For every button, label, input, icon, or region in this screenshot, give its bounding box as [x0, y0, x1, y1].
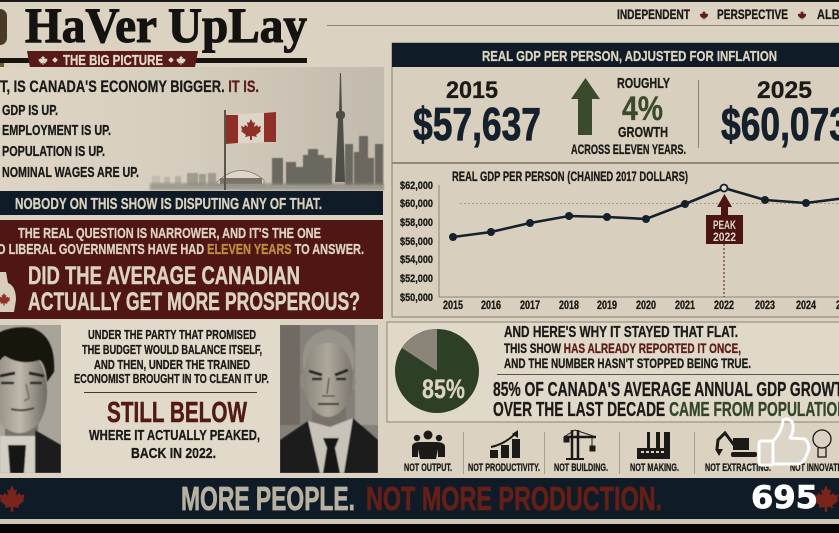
- stat: 2015: $57,637: [413, 98, 541, 150]
- portrait: left: [0, 325, 61, 473]
- x axis labels: 2023: [755, 300, 775, 312]
- stat: growth: ACROSS ELEVEN YEARS.: [571, 142, 686, 157]
- stat: growth: 4%: [622, 90, 663, 128]
- y axis labels: $54,000: [400, 254, 433, 266]
- text block: still below: STILL BELOW: [107, 397, 247, 429]
- x axis labels: 2016: [481, 300, 501, 312]
- panel: the real question: ACTUALLY GET MORE PROSPEROUS?: [28, 288, 360, 316]
- list: GDP IS UP.: [2, 103, 58, 119]
- portrait: right: [280, 325, 378, 473]
- text block: still below: UNDER THE PARTY THAT PROMISED: [88, 327, 256, 342]
- explanation text: AND THE NUMBER HASN'T STOPPED BEING TRUE.: [504, 356, 751, 371]
- ribbon: the big picture: THE BIG PICTURE: [63, 52, 163, 69]
- x axis labels: 2021: [675, 300, 695, 312]
- text block: still below: BACK IN 2022.: [131, 445, 216, 462]
- bottom banner: MORE PEOPLE.: [181, 480, 355, 517]
- icon: excavator: [715, 433, 757, 457]
- heading: T, IS CANADA'S ECONOMY BIGGER. IT IS.: [0, 77, 259, 96]
- arrow: up: [571, 78, 600, 135]
- icon: people: [412, 430, 445, 459]
- top tagline: PERSPECTIVE: [717, 7, 788, 22]
- banner: nobody disputing: NOBODY ON THIS SHOW IS DISPUTING ANY OF THAT.: [15, 196, 322, 213]
- y axis labels: $58,000: [400, 217, 433, 229]
- callout: peak 2022: 2022: [713, 230, 736, 244]
- line chart: [400, 169, 839, 312]
- bottom banner: [0, 478, 839, 519]
- icon: Canadian flag: [224, 110, 276, 190]
- icon labels: [404, 462, 839, 474]
- text block: still below: THE BUDGET WOULD BALANCE ITSELF,: [82, 342, 262, 357]
- icon: person with maple leaf: [0, 272, 16, 312]
- pie chart: [395, 329, 479, 413]
- panel: the real question: THE REAL QUESTION IS NARROWER, AND IT'S THE ONE: [18, 226, 321, 242]
- x axis labels: 2017: [520, 300, 540, 312]
- pie chart: 85%: [422, 374, 465, 404]
- list: [2, 103, 139, 181]
- icon labels: NOT OUTPUT.: [404, 462, 452, 474]
- x axis labels: [443, 300, 839, 312]
- callout: peak 2022: [706, 194, 743, 244]
- x axis labels: 2018: [559, 300, 579, 312]
- data line: [453, 188, 839, 237]
- x axis labels: 2015: [443, 300, 463, 312]
- list: NOMINAL WAGES ARE UP.: [2, 165, 139, 181]
- list: POPULATION IS UP.: [2, 144, 105, 160]
- stat: 2025: 2025: [757, 77, 812, 104]
- icon: thumbs up overlay: [759, 419, 809, 465]
- explanation text: THIS SHOW HAS ALREADY REPORTED IT ONCE,: [504, 341, 741, 356]
- x axis labels: 2020: [636, 300, 656, 312]
- panel: real GDP per person: [392, 43, 839, 317]
- chart title: REAL GDP PER PERSON (CHAINED 2017 DOLLARS): [452, 169, 688, 184]
- x axis labels: 2022: [714, 300, 734, 312]
- y axis labels: $60,000: [400, 198, 433, 210]
- explanation text: [493, 324, 839, 421]
- stat: 2015: [413, 77, 541, 150]
- icon: crane: [564, 430, 596, 459]
- neck: [312, 406, 346, 426]
- y axis labels: [400, 180, 433, 304]
- centre panel backing: [61, 320, 280, 478]
- x axis labels: 2019: [597, 300, 617, 312]
- banner: nobody disputing: [0, 191, 383, 215]
- icon labels: NOT BUILDING.: [554, 462, 608, 474]
- stat: growth: GROWTH: [618, 125, 668, 141]
- text block: still below: WHERE IT ACTUALLY PEAKED,: [89, 427, 260, 444]
- icon: lightbulb: [813, 430, 831, 457]
- stat: 2015: 2015: [446, 77, 498, 104]
- text block: still below: [74, 327, 269, 462]
- dome: [217, 170, 264, 185]
- icon: factory: [637, 432, 670, 459]
- panel: the real question: O LIBERAL GOVERNMENTS HAVE HAD ELEVEN YEARS TO ANSWER.: [0, 242, 364, 258]
- panel: why it stayed flat: [387, 322, 839, 422]
- stat: growth: ROUGHLY: [617, 76, 670, 92]
- top tagline: [327, 7, 839, 26]
- like count: 695: [751, 480, 818, 516]
- bottom banner: NOT MORE PRODUCTION.: [366, 480, 662, 517]
- stat: growth: [571, 76, 686, 157]
- y axis labels: $50,000: [400, 292, 433, 304]
- icon row: not output etc: [404, 430, 839, 474]
- masthead: [0, 0, 307, 69]
- icon: microphone: [0, 9, 7, 68]
- list: EMPLOYMENT IS UP.: [2, 123, 111, 139]
- callout: peak 2022: PEAK: [713, 218, 736, 232]
- icon: CN tower: [335, 73, 345, 182]
- panel header: [392, 43, 839, 67]
- x axis labels: 2024: [796, 300, 816, 312]
- icon: bar chart growth: [490, 430, 520, 458]
- icon labels: NOT MAKING.: [630, 462, 679, 474]
- panel: is the economy bigger: [0, 67, 384, 215]
- y axis labels: $62,000: [400, 180, 433, 192]
- text block: still below: ECONOMIST BROUGHT IN TO CLEAN IT UP.: [74, 371, 269, 386]
- text block: still below: AND THEN, UNDER THE TRAINED: [94, 357, 250, 372]
- top tagline: INDEPENDENT: [617, 7, 691, 22]
- y axis labels: $56,000: [400, 236, 433, 248]
- icon labels: NOT PRODUCTIVITY.: [468, 462, 540, 474]
- skyline illustration: [150, 73, 384, 190]
- panel: the real question: DID THE AVERAGE CANADIAN: [28, 262, 300, 290]
- y axis labels: $52,000: [400, 273, 433, 285]
- panel: the real question: [0, 220, 383, 319]
- explanation text: AND HERE'S WHY IT STAYED THAT FLAT.: [504, 324, 738, 341]
- icon labels: NOT EXTRACTING.: [705, 462, 771, 474]
